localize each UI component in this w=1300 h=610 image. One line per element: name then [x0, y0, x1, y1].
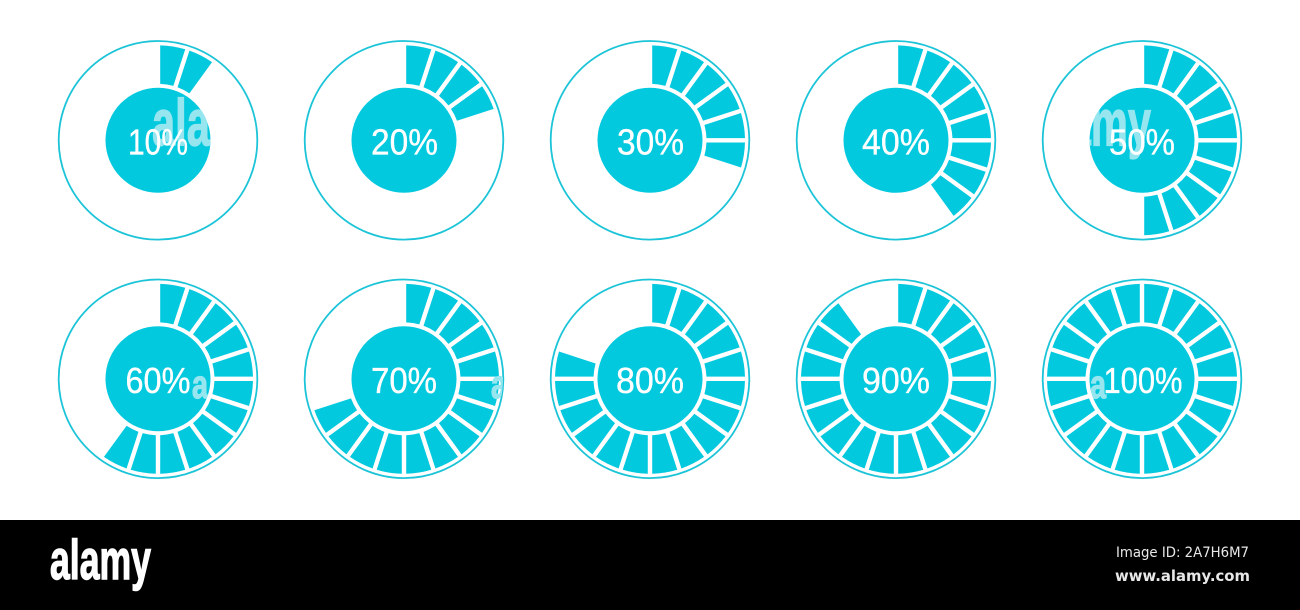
center disc: 10%: [106, 88, 210, 193]
gauge: 50%: [1042, 40, 1242, 240]
website: www.alamy.com: [1115, 567, 1250, 585]
center disc: 50%: [1090, 88, 1194, 193]
label: 100%: 100%: [1104, 360, 1182, 401]
gauge: 70%: [303, 280, 511, 488]
label: 10%: 10%: [128, 121, 188, 162]
segments: 10%: [160, 45, 213, 97]
gauge: 60%: [59, 280, 265, 488]
watermark fragment: 70%: a: [491, 363, 508, 407]
watermark fragment: 60%: a: [192, 363, 209, 407]
label: 50%: 50%: [1109, 121, 1175, 162]
gauge: 80%: [543, 280, 757, 488]
gauge: 100%: [1042, 278, 1242, 479]
segments: 30%: [652, 45, 757, 179]
label: 60%: 60%: [126, 360, 190, 401]
gauge: 30%: [551, 41, 757, 240]
image id: Image ID: 2A7H6M7: [1116, 545, 1249, 561]
label: 40%: 40%: [862, 121, 930, 162]
segments: 50%: [1123, 45, 1249, 250]
segments: 40%: [898, 45, 1003, 222]
segments: 70%: [303, 284, 511, 488]
segments: 90%: [789, 284, 1003, 488]
label: 90%: 90%: [862, 360, 930, 401]
segments: 20%: [406, 45, 505, 138]
logo: alamy: alamy: [50, 528, 151, 591]
center disc: 40%: [844, 88, 948, 193]
watermark fragment: 10%: alamy: [152, 85, 270, 159]
watermark fragment: 50%: alamy: [1033, 85, 1151, 159]
footer bar: [0, 520, 1300, 610]
segments: 60%: [103, 284, 265, 488]
center disc: 60%: [106, 326, 210, 431]
gauge: 40%: [797, 41, 1003, 240]
segments: 100%: [1035, 269, 1249, 488]
gauge: 10%: [59, 41, 270, 240]
label: 80%: 80%: [616, 360, 684, 401]
watermark fragment: 100%: a: [1090, 363, 1107, 407]
center disc: 30%: [598, 88, 702, 193]
label: 70%: 70%: [371, 360, 437, 401]
label: 20%: 20%: [371, 121, 438, 162]
gauge: 90%: [789, 280, 1003, 488]
center disc: 100%: [1090, 326, 1194, 431]
center disc: 70%: [352, 326, 456, 431]
center disc: 90%: [844, 326, 948, 431]
label: 30%: 30%: [617, 121, 684, 162]
gauge: 20%: [305, 41, 505, 240]
segments: 80%: [543, 284, 757, 488]
center disc: 80%: [598, 326, 702, 431]
center disc: 20%: [352, 88, 456, 193]
